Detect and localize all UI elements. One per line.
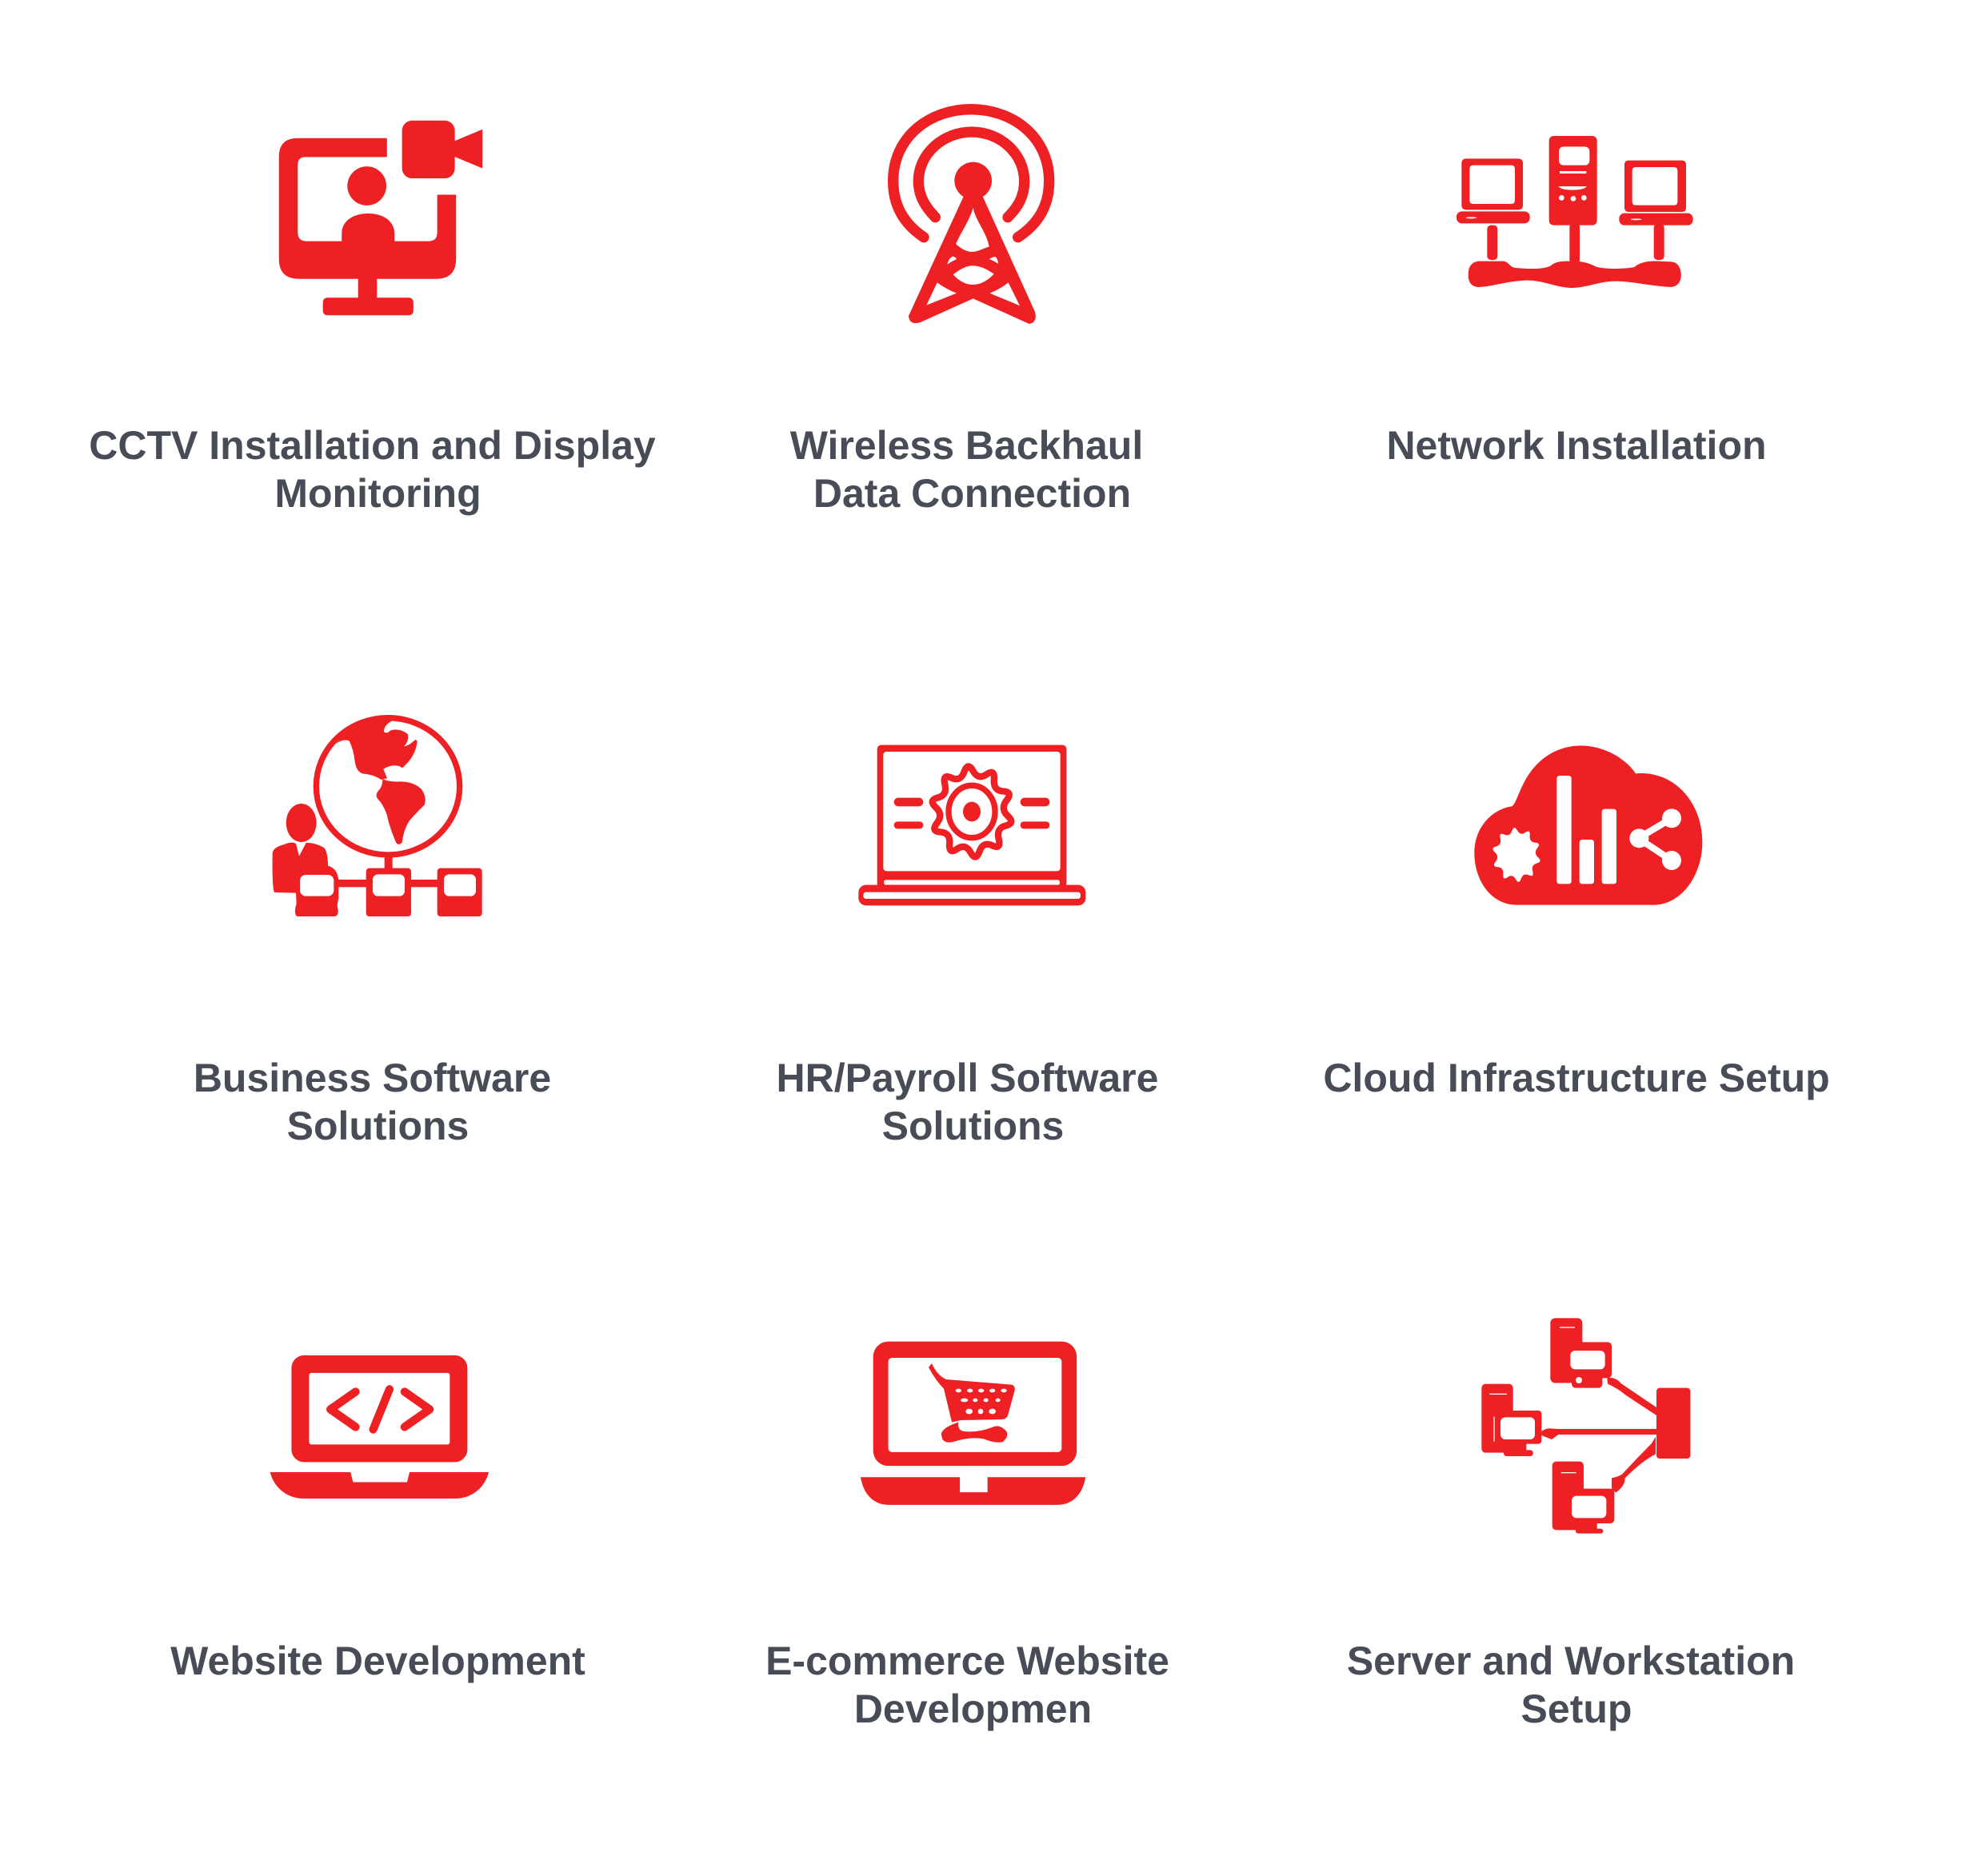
label: HR/Payroll Software: [777, 1056, 1158, 1100]
icon: laptop with cart: [861, 1342, 1085, 1505]
panel: cloud: [1323, 745, 1830, 1100]
panel: server: [1347, 1318, 1795, 1731]
label: E-commerce Website: [765, 1639, 1169, 1683]
label: Wireless Backhaul: [790, 423, 1143, 468]
panel: network: [1386, 136, 1767, 468]
label: Data Connection: [813, 471, 1131, 516]
icon: servers and workstations: [1481, 1318, 1690, 1534]
label: Solutions: [287, 1104, 469, 1148]
label: Business Software: [194, 1056, 551, 1100]
label: Monitoring: [274, 471, 482, 516]
panel: wireless: [790, 110, 1143, 516]
panel: CCTV: [89, 121, 656, 516]
label: Website Development: [170, 1639, 585, 1683]
icon: networked computers: [1457, 136, 1693, 288]
label: CCTV Installation and Display: [89, 423, 656, 468]
panel: website: [170, 1355, 585, 1683]
label: Network Installation: [1386, 423, 1767, 468]
panel: ecommerce: [765, 1342, 1169, 1731]
panel: HR payroll: [777, 745, 1158, 1148]
label: Solutions: [882, 1104, 1064, 1148]
icon: radio tower: [893, 110, 1049, 324]
icon: cloud with chart and share: [1474, 745, 1702, 905]
label: Developmen: [854, 1686, 1092, 1731]
label: Server and Workstation: [1347, 1639, 1795, 1683]
icon: laptop with code: [270, 1355, 489, 1499]
icon: monitor with person and camera: [279, 121, 482, 315]
panel: business software: [194, 717, 551, 1148]
icon: laptop with gear: [858, 745, 1085, 905]
icon: globe, person and computers: [273, 717, 482, 916]
label: Setup: [1521, 1686, 1632, 1731]
label: Cloud Infrastructure Setup: [1323, 1056, 1830, 1100]
